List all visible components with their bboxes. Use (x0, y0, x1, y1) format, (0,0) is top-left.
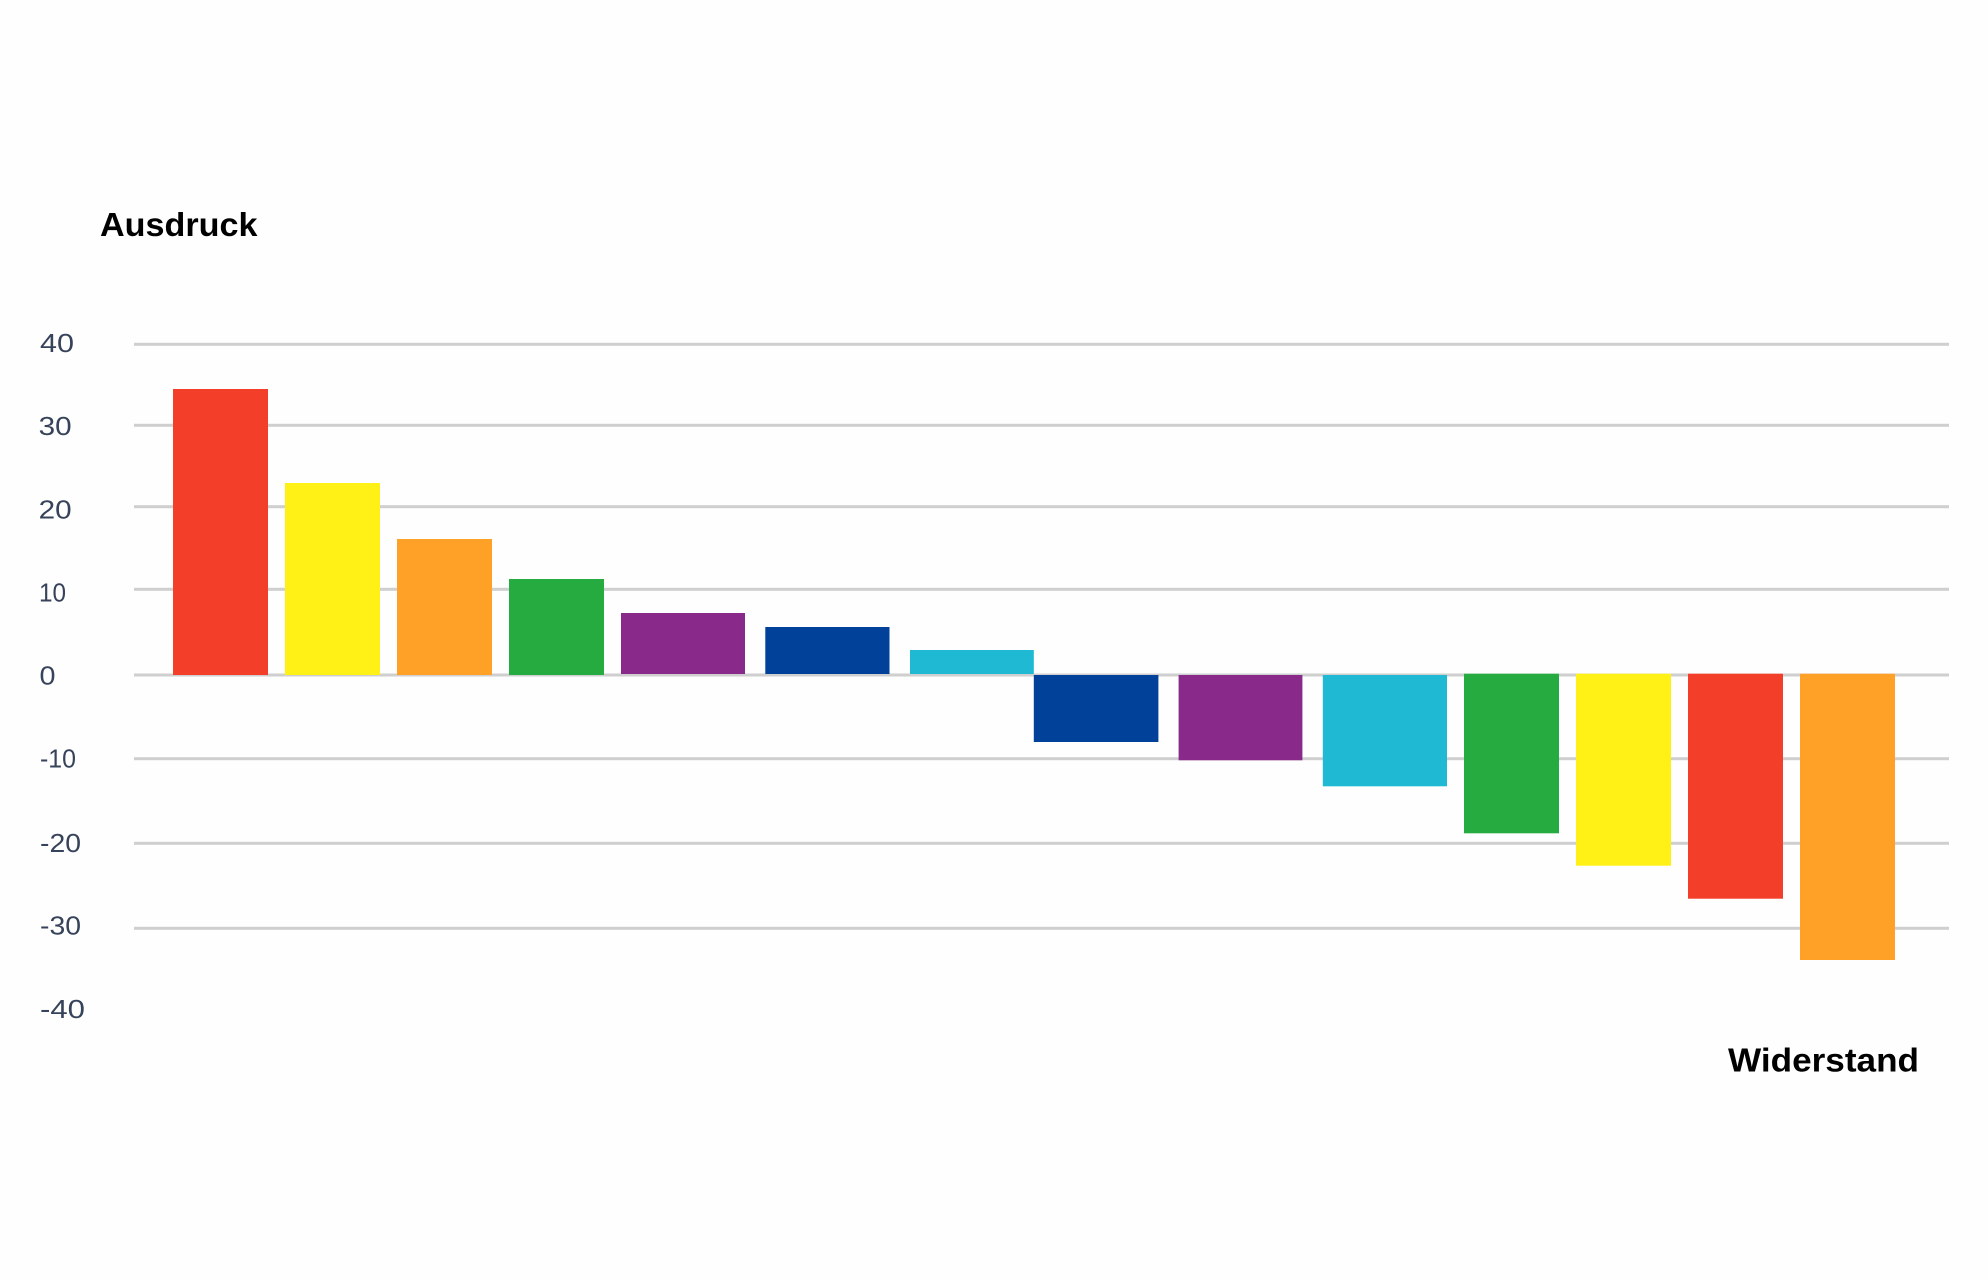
y-axis tick labels: 10 (39, 578, 66, 608)
y-axis tick labels: 0 (40, 660, 56, 690)
y-axis tick labels: -20 (40, 828, 81, 858)
y-axis tick labels (39, 328, 85, 1024)
y-axis tick labels: 40 (40, 328, 74, 358)
y-axis tick labels: -40 (40, 994, 85, 1024)
y-axis tick labels: 30 (39, 411, 72, 441)
y-axis tick labels: 20 (39, 495, 72, 525)
y-axis tick labels: -30 (40, 911, 81, 941)
negative bars (Widerstand) (1034, 674, 1895, 960)
y-axis tick labels: -10 (40, 744, 76, 774)
y-axis title: Ausdruck: Ausdruck (100, 206, 258, 243)
x-axis title: Widerstand: Widerstand (1728, 1042, 1919, 1079)
positive bars (Ausdruck) (173, 389, 1034, 675)
